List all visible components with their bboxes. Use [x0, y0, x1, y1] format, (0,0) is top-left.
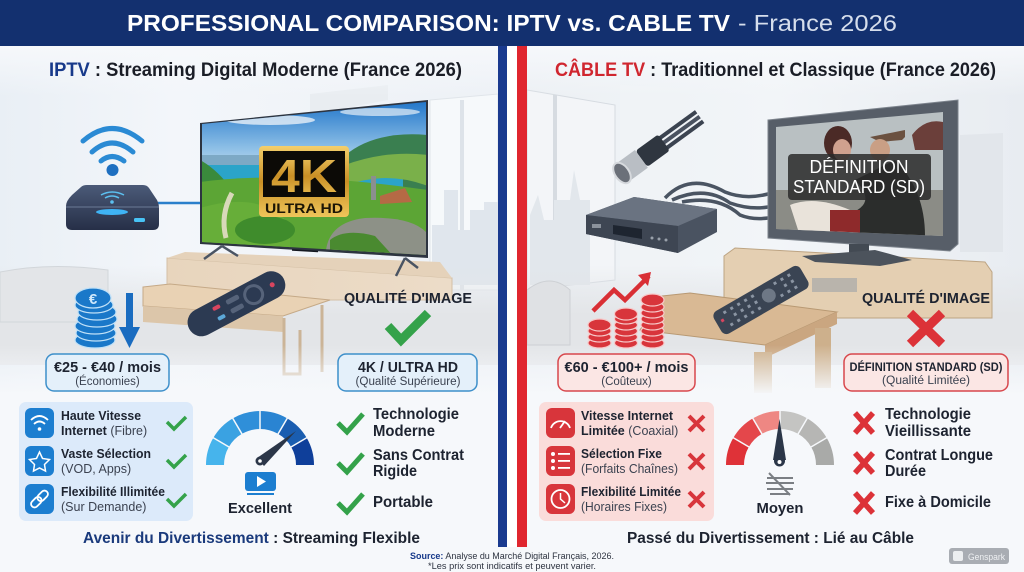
tagline: cable: Passé du Divertissement : Lié au Câble [627, 530, 914, 547]
feature: high speed [25, 408, 186, 438]
callout: cable quality [844, 354, 1008, 391]
limitation: flexibility: Flexibilité Limitée [581, 485, 681, 499]
callout: IPTV price [46, 354, 169, 391]
callout: IPTV quality: 4K / ULTRA HD [358, 360, 458, 376]
tagline: IPTV: Avenir du Divertissement : Streaming Flexible [83, 530, 420, 547]
limitation: speed: Limitée (Coaxial) [581, 424, 678, 438]
icon: falling price coins: € [89, 291, 98, 308]
callout: IPTV price: (Économies) [75, 375, 140, 388]
label: standard definition: STANDARD (SD) [793, 176, 925, 197]
list: cable disadvantages: Vieillissante [885, 423, 971, 440]
heading: cable TV: CÂBLE TV : Traditionnel et Classique (France 2026) [555, 57, 996, 81]
title banner [0, 0, 1024, 46]
feature: wide selection [25, 446, 186, 476]
source note: *Les prix sont indicatifs et peuvent varier. [428, 561, 596, 571]
list: IPTV advantages [338, 406, 465, 512]
feature: high speed: Internet (Fibre) [61, 424, 147, 438]
limitation: flexibility: (Horaires Fixes) [581, 500, 667, 514]
list: IPTV advantages: Moderne [373, 423, 435, 440]
chart: cable gauge medium [732, 410, 828, 517]
limitation: flexibility [546, 484, 704, 514]
list: cable disadvantages: Contrat Longue [885, 447, 993, 464]
feature: flexibility: (Sur Demande) [61, 500, 146, 514]
badge: 4K Ultra HD [259, 146, 349, 217]
panel: cable limitations [539, 402, 714, 521]
heading: IPTV: IPTV : Streaming Digital Moderne (France 2026) [49, 59, 462, 81]
icon: IPTV box with cable [66, 185, 201, 230]
icon: wifi signal [83, 128, 142, 176]
icon: 4K television [200, 100, 428, 276]
label: IPTV image quality: QUALITÉ D'IMAGE [344, 290, 472, 307]
watermark: Genspark [949, 548, 1009, 564]
callout: IPTV quality: (Qualité Supérieure) [356, 376, 461, 388]
icon: falling price coins [75, 288, 140, 348]
chart: cable gauge medium: Moyen [756, 500, 804, 517]
label: standard definition: DÉFINITION [810, 156, 908, 177]
callout: cable quality: DÉFINITION STANDARD (SD) [850, 359, 1002, 374]
callout: cable quality: (Qualité Limitée) [882, 375, 970, 387]
background right room [527, 46, 1024, 547]
source note [410, 551, 614, 571]
limitation: speed: Vitesse Internet [581, 409, 674, 423]
feature: high speed: Haute Vitesse [61, 409, 141, 423]
icon: cable remote [711, 264, 811, 336]
feature: flexibility: Flexibilité Illimitée [61, 485, 165, 499]
icon: large check [388, 313, 428, 340]
list: IPTV advantages: Portable [373, 494, 433, 511]
list: IPTV advantages: Rigide [373, 463, 417, 480]
callout: cable price: (Coûteux) [601, 376, 652, 388]
icon: cable box [586, 183, 768, 253]
list: cable disadvantages: Fixe à Domicile [885, 494, 991, 511]
icon: SD television [768, 100, 958, 266]
icon: IPTV remote [183, 266, 290, 341]
list: cable disadvantages: Durée [885, 463, 926, 480]
list: cable disadvantages [855, 406, 993, 513]
chart: IPTV gauge excellent [212, 410, 308, 517]
label: standard definition [788, 154, 931, 200]
callout: IPTV price: €25 - €40 / mois [54, 360, 161, 376]
limitation: speed [546, 408, 704, 438]
title banner: PROFESSIONAL COMPARISON: IPTV vs. CABLE TV [127, 10, 731, 36]
badge: 4K Ultra HD: ULTRA HD [265, 200, 343, 216]
list: IPTV advantages: Technologie [373, 406, 459, 423]
feature: wide selection: Vaste Sélection [61, 447, 151, 461]
limitation: selection: Sélection Fixe [581, 447, 662, 461]
watermark: Genspark: Genspark [968, 552, 1005, 562]
panel: IPTV features [19, 402, 193, 521]
callout: cable price [558, 354, 695, 391]
list: IPTV advantages: Sans Contrat [373, 447, 465, 464]
icon: coaxial connector [610, 107, 706, 186]
icon: weak signal [766, 473, 794, 495]
footer background [0, 547, 1024, 572]
limitation: selection [546, 446, 704, 476]
background left room [0, 46, 498, 547]
icon: rising price coins [588, 272, 664, 348]
top fade [0, 46, 1024, 96]
icon: large cross [910, 313, 942, 344]
source note: Source: Analyse du Marché Digital Français, 2026. [410, 551, 614, 561]
feature: flexibility [25, 484, 186, 514]
central tricolor divider [498, 46, 527, 547]
limitation: selection: (Forfaits Chaînes) [581, 462, 678, 476]
list: cable disadvantages: Technologie [885, 406, 971, 423]
title banner: - France 2026 [738, 10, 897, 36]
badge: 4K Ultra HD: 4K [271, 150, 337, 202]
feature: wide selection: (VOD, Apps) [61, 462, 131, 476]
callout: IPTV quality [338, 354, 477, 391]
chart: IPTV gauge excellent: Excellent [228, 500, 292, 517]
label: cable image quality: QUALITÉ D'IMAGE [862, 290, 990, 307]
callout: cable price: €60 - €100+ / mois [564, 360, 688, 376]
icon: play screen [245, 472, 276, 495]
